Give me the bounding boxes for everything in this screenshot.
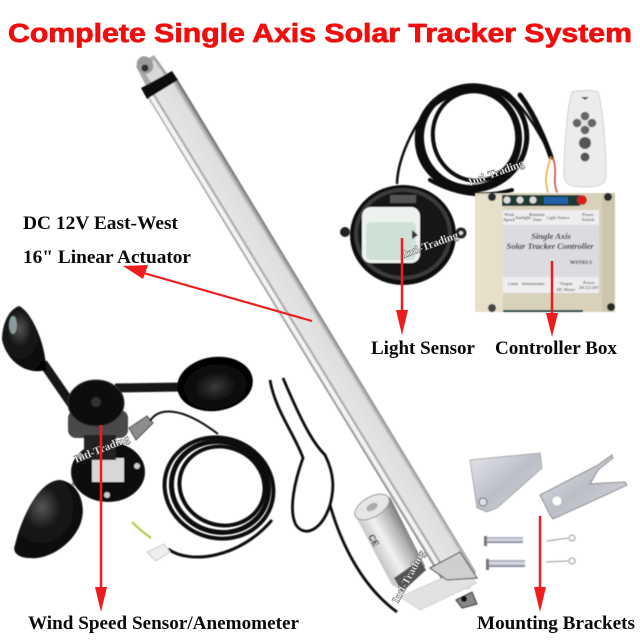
watermark: cable: Intl-Trading: [467, 157, 526, 189]
power cord: [270, 378, 397, 612]
controller text: [504, 212, 600, 292]
controller text: Switch: [582, 217, 595, 222]
watermark: anemometer: Intl-Trading: [73, 433, 132, 466]
controller text: Output: [560, 281, 573, 286]
label: mounting brackets: Mounting Brackets: [477, 613, 635, 634]
arrow: actuator: [123, 265, 312, 321]
controller text: Sunlight: [515, 215, 531, 220]
controller text: DC12/24V: [579, 285, 600, 290]
label: actuator: 16" Linear Actuator: [23, 247, 192, 268]
collar: [141, 71, 178, 99]
label: light sensor: Light Sensor: [371, 338, 476, 359]
cup: top left: [2, 306, 46, 371]
icon: mounting brackets: [470, 453, 627, 570]
cotter pins: [546, 535, 575, 564]
controller text: Light Sensor: [546, 215, 570, 220]
base: [71, 442, 145, 502]
terminals: [502, 195, 580, 206]
controller text: Time: [532, 217, 542, 222]
cup: bottom: [14, 480, 83, 558]
icon: linear actuator: [134, 53, 477, 612]
plug and wire: [132, 522, 170, 561]
hub: [68, 380, 124, 426]
controller text: Power: [583, 280, 595, 285]
body: [68, 410, 128, 438]
icon: remote control: [564, 90, 606, 187]
controller text: Limit: [508, 281, 519, 286]
icon: light sensor cable: [397, 74, 557, 202]
controller text: Rotation: [529, 212, 545, 217]
bracket plate: [470, 453, 542, 512]
icon: anemometer: [2, 306, 288, 561]
label: controller box: Controller Box: [495, 338, 617, 359]
icon: controller box: Solar Tracker Controller: [506, 241, 594, 251]
label: wind speed sensor: Wind Speed Sensor/Anemometer: [28, 613, 300, 634]
label: actuator: [23, 213, 192, 268]
controller text: Anemometer: [521, 281, 545, 286]
bracket fork: [540, 455, 627, 519]
connector: [129, 416, 153, 440]
arrow: light sensor: [396, 238, 408, 335]
controller text: Speed: [504, 217, 515, 222]
watermark: light sensor: Intl-Trading: [401, 229, 460, 261]
motor: CE: [366, 533, 381, 548]
icon: controller box: Single Axis: [531, 231, 571, 241]
icon: light sensor dome: [340, 185, 466, 285]
icon: controller box: WST03-5: [570, 260, 592, 266]
icon: controller box: [475, 193, 615, 312]
rod: [134, 53, 172, 92]
tube: [148, 80, 476, 590]
motor: [351, 489, 426, 592]
cup: right: [174, 352, 256, 416]
arrow: wind sensor: [95, 425, 107, 612]
gearbox: [400, 552, 477, 610]
controller text: Power: [582, 212, 594, 217]
controller text: DC Motor: [557, 287, 576, 292]
controller text: Wind: [504, 212, 515, 217]
arrow: controller box: [546, 261, 558, 337]
watermark: actuator: Intl-Trading: [390, 548, 428, 605]
label: actuator: DC 12V East-West: [23, 213, 179, 234]
arrow: mounting brackets: [534, 516, 546, 612]
title: Complete Single Axis Solar Tracker System: [8, 20, 632, 48]
label plate: [503, 210, 599, 293]
arms: [43, 363, 182, 486]
coil cable: [150, 412, 288, 557]
pins: [484, 536, 525, 570]
